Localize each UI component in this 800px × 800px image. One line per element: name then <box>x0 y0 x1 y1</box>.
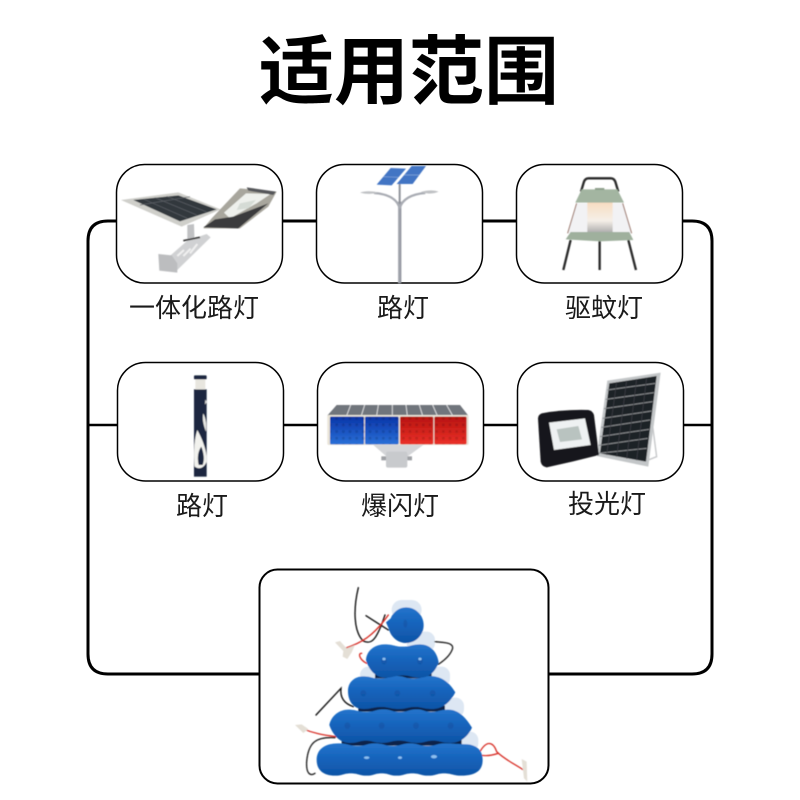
panel: battery packs <box>260 570 548 784</box>
panel frame <box>116 164 282 283</box>
battery layer 2 <box>329 709 472 743</box>
panel frame <box>316 164 482 283</box>
label: 驱蚊灯 <box>565 293 643 323</box>
highlights <box>344 620 454 729</box>
panel frame <box>518 362 684 481</box>
wires <box>302 588 525 775</box>
panel frame <box>118 362 284 481</box>
panel: mosquito lamp <box>516 164 682 323</box>
label: 路灯 <box>176 491 228 521</box>
panel frame <box>318 362 484 481</box>
label: 路灯 <box>377 293 429 323</box>
panel: bollard light <box>118 362 284 521</box>
icon: solar street light <box>121 187 277 273</box>
label: 投光灯 <box>568 489 646 519</box>
panel: floodlight <box>518 362 684 519</box>
panel: flash light <box>318 362 484 521</box>
panel: integrated street light <box>116 164 282 323</box>
battery layer 1 <box>317 743 483 776</box>
panel frame <box>516 164 682 283</box>
panel frame <box>260 570 548 784</box>
icon: decorated post <box>194 375 207 477</box>
icon: warning flasher <box>327 405 469 468</box>
battery layer 3 <box>348 676 455 709</box>
pale back shells <box>360 600 478 752</box>
battery layer 4 <box>366 644 439 678</box>
icon: lantern <box>563 178 636 270</box>
middle row connector <box>88 424 712 426</box>
battery layer 5 <box>386 607 424 643</box>
title: 适用范围 <box>259 30 559 114</box>
label: 爆闪灯 <box>361 491 439 521</box>
panel: street light <box>316 164 482 323</box>
icon: double-arm street lamp <box>360 166 439 283</box>
connector frame <box>88 221 712 674</box>
wire connectors <box>295 641 527 782</box>
icon: floodlight and solar panel <box>538 373 661 467</box>
label: 一体化路灯 <box>129 293 259 323</box>
dark seams between layers <box>342 673 462 746</box>
icon: stacked blue batteries <box>295 588 527 782</box>
